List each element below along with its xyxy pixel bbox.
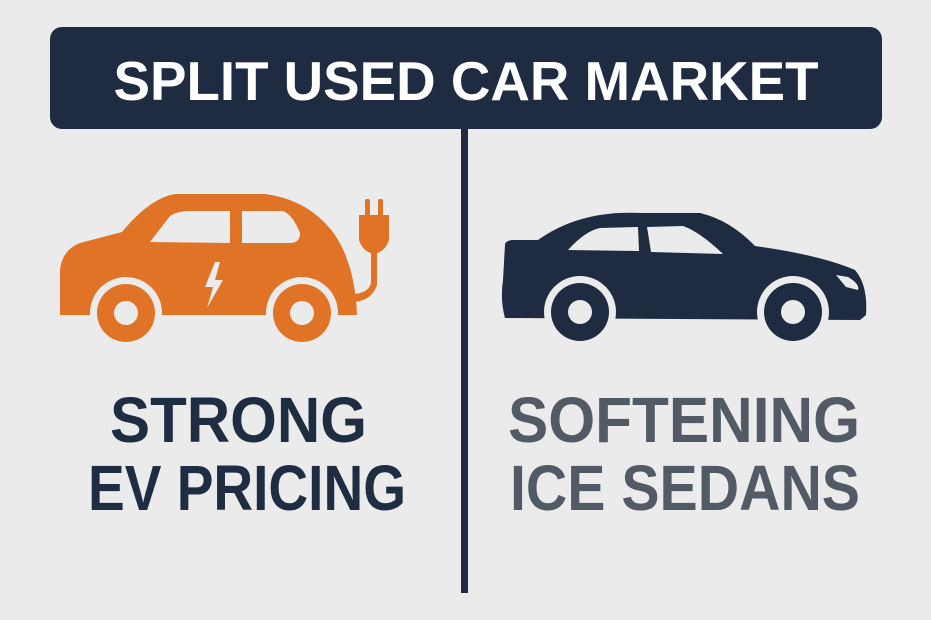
right label: SOFTENING (508, 384, 860, 456)
title banner (50, 27, 882, 129)
right label (508, 384, 860, 524)
left label: EV PRICING (88, 452, 406, 524)
windows (150, 211, 230, 243)
left label (88, 384, 406, 524)
left label: STRONG (110, 384, 367, 456)
title banner: SPLIT USED CAR MARKET (114, 50, 818, 112)
plug (365, 199, 370, 217)
icon: orange electric car (60, 194, 389, 349)
right label: ICE SEDANS (510, 452, 860, 524)
divider line (461, 128, 468, 593)
wheels (90, 277, 162, 349)
icon: dark sedan (502, 213, 866, 348)
